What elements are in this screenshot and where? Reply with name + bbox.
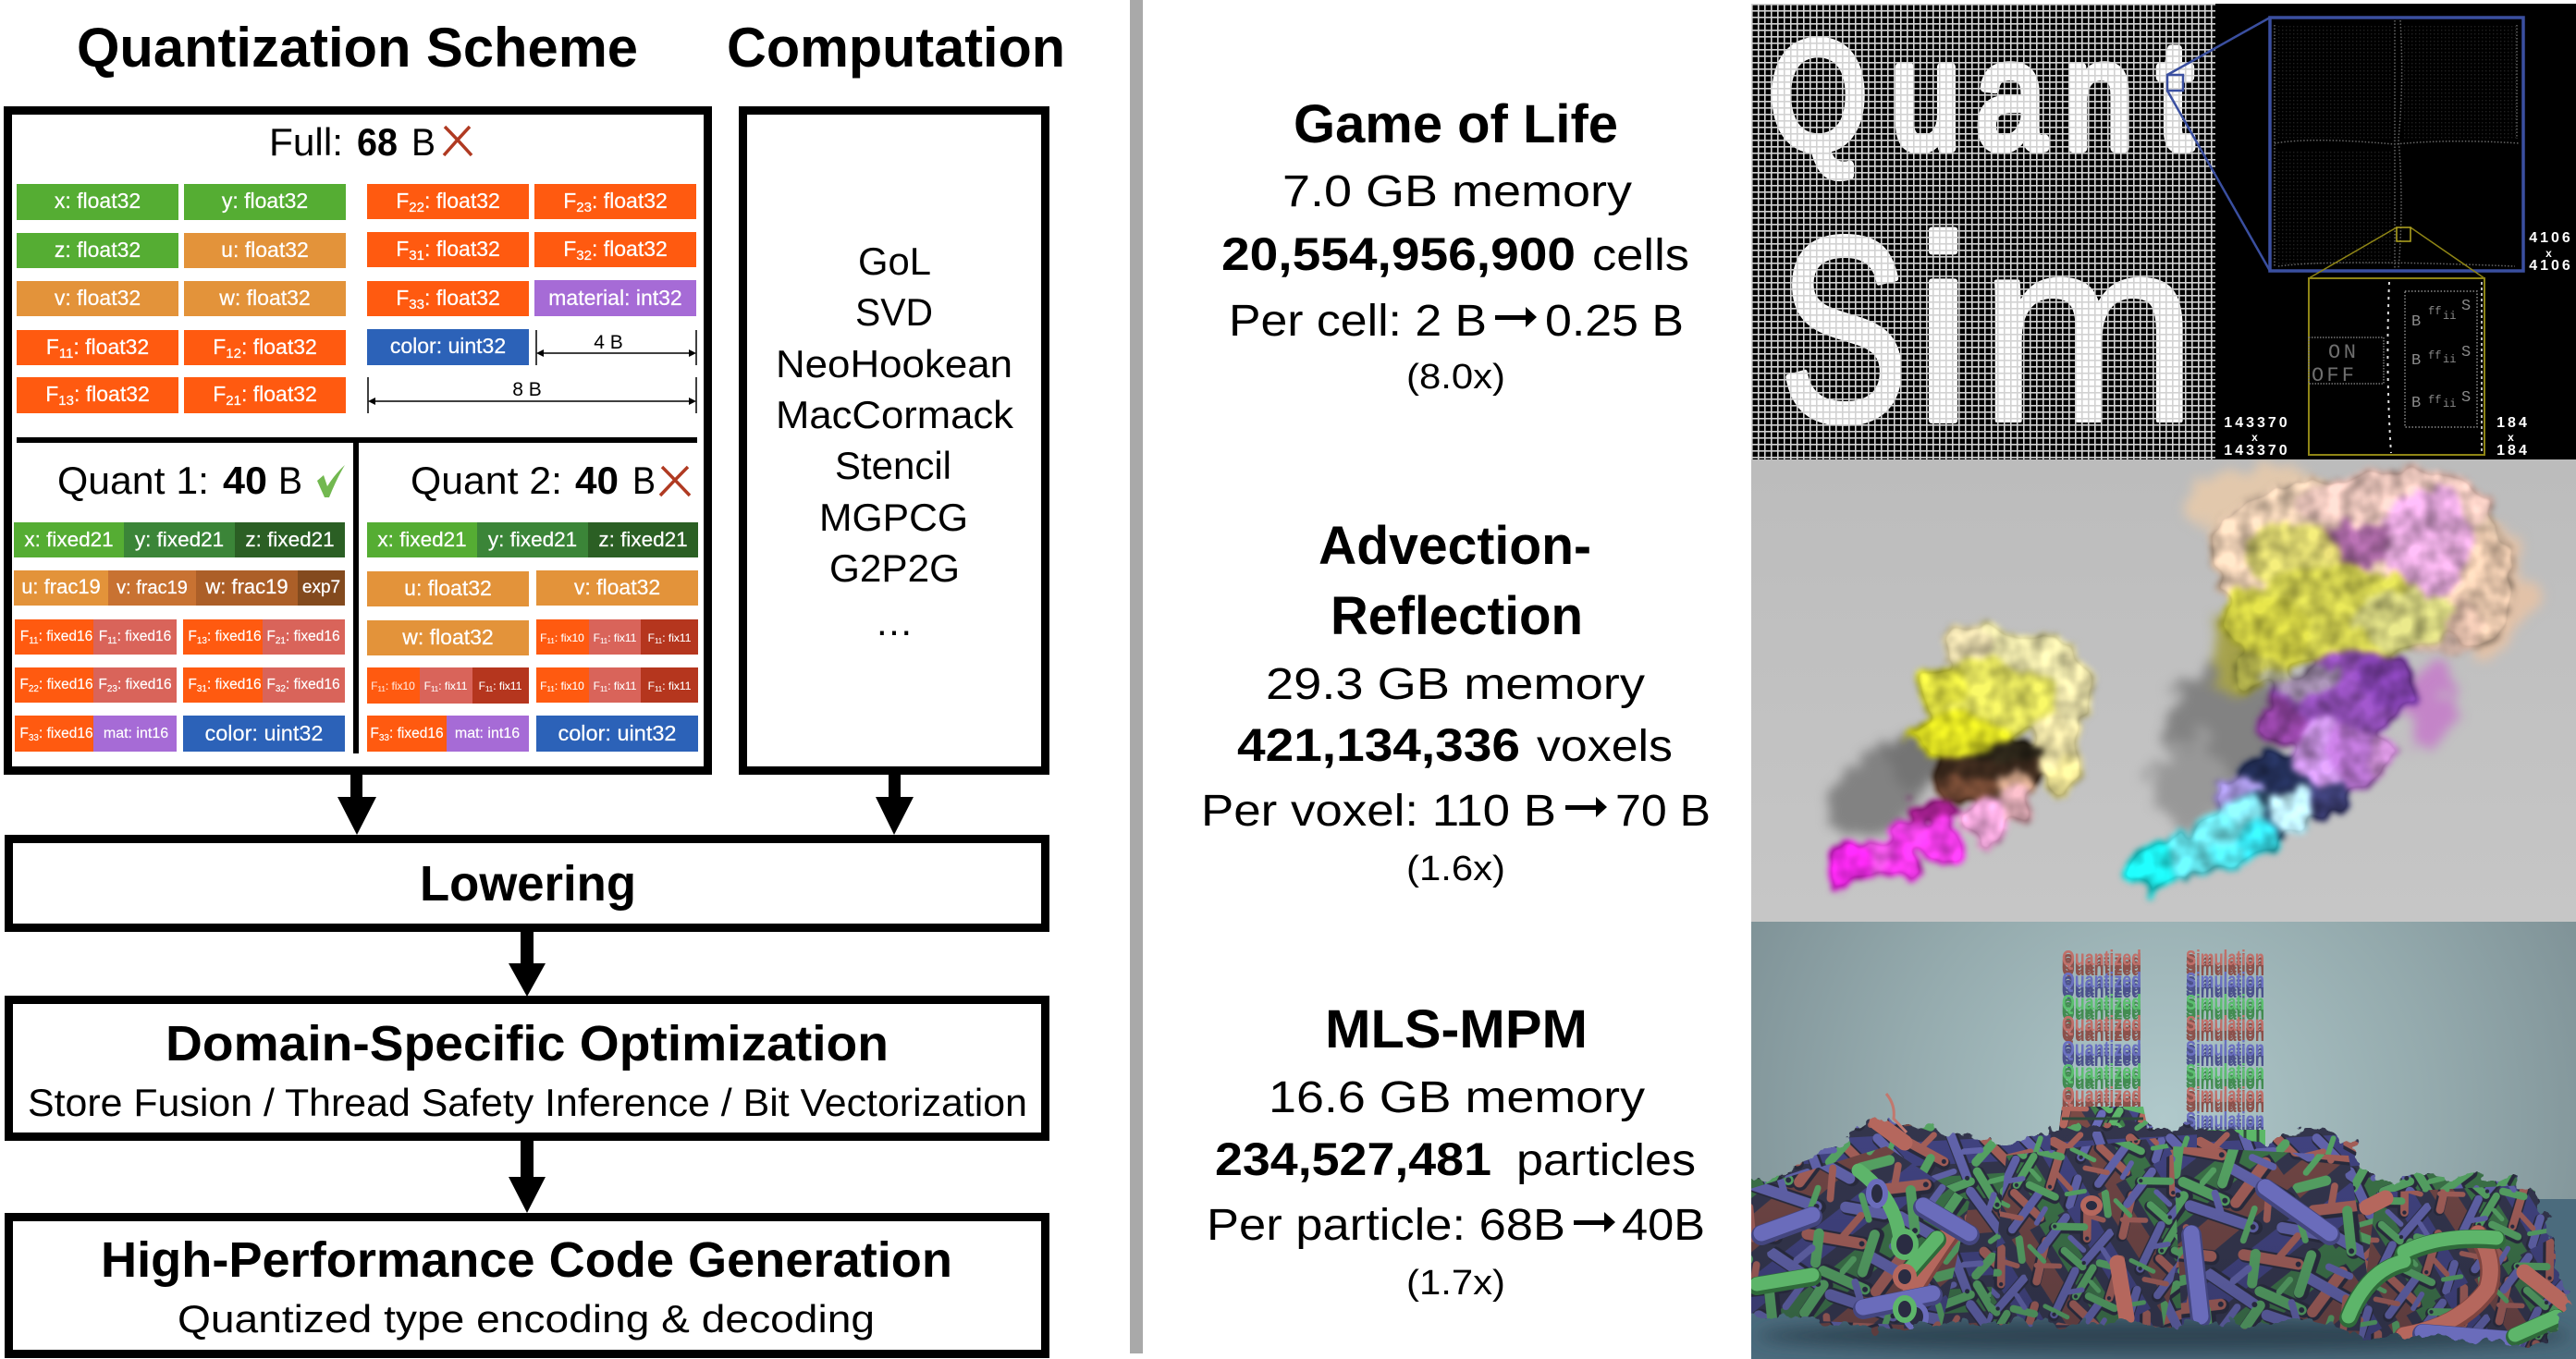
- falling words: Quantized: Quantized: [2062, 946, 2141, 970]
- quant 2 layout: deformation and color: F: [371, 680, 378, 692]
- full layout: 32-bit field cells: 32: [576, 248, 592, 263]
- full layout: 32-bit field cells: : float32: [424, 189, 500, 213]
- quant 2 layout: deformation and color: mat: int16: [455, 726, 520, 741]
- quant 1 layout: deformation and color: 33: [29, 733, 39, 743]
- icon: green check: [317, 465, 345, 497]
- title: Full 68 B: Full:: [269, 120, 343, 164]
- quant 1 layout: position and velocity: v: frac19: [117, 578, 188, 598]
- falling words: Simulation: Simulation: [2186, 1083, 2264, 1107]
- zoom inset: 184 x 184: ff: [2428, 349, 2441, 362]
- quant 1 layout: deformation and color: F: [188, 629, 197, 644]
- box: High-Performance Code Generation: [9, 1217, 1045, 1353]
- title: Quant 2 40 B: B: [632, 459, 656, 502]
- icon: red cross: [444, 127, 472, 155]
- size labels: [2224, 230, 2573, 459]
- quant 1 layout: deformation and color: F: [188, 677, 197, 692]
- quant 2 layout: deformation and color: [367, 619, 698, 752]
- title: Full 68 B: 68: [357, 120, 398, 164]
- title: Quant 1 40 B: Quant 1:: [57, 459, 209, 502]
- full layout: 32-bit field cells: y: float32: [222, 189, 308, 213]
- text block: Game of Life: (8.0x): [1406, 358, 1505, 397]
- quant 2 layout: deformation and color: 11: [655, 637, 663, 645]
- quant 1 layout: deformation and color: : fixed16: [286, 629, 340, 644]
- text block: Advection-Reflection: Per voxel: 110 B: [1201, 787, 1556, 836]
- computation kernels: NeoHookean: [776, 342, 1012, 386]
- image: Game of Life simulation: [1751, 4, 2576, 477]
- title: Quant 2 40 B: Quant 2:: [411, 459, 562, 502]
- computation kernels: [776, 239, 1014, 643]
- quant 1 layout: deformation and color: mat: int16: [104, 726, 168, 741]
- quant 2 layout: deformation and color: F: [370, 726, 379, 741]
- quant 1 layout: deformation and color: : fixed16: [117, 629, 171, 644]
- quant 2 layout: deformation and color: 11: [600, 637, 608, 645]
- falling words: Quantized: Quantized: [2062, 1036, 2141, 1060]
- quant 2 layout: deformation and color: 11: [378, 685, 386, 693]
- quant 1 layout: deformation and color: F: [19, 677, 29, 692]
- quant 1 layout: position and velocity: x: fixed21: [24, 528, 114, 551]
- box: High-Performance Code Generation: Quantized type encoding & decoding: [178, 1297, 875, 1341]
- heading: Computation: Computation: [727, 17, 1065, 79]
- falling words: Simulation: Simulation: [2186, 1108, 2264, 1132]
- text block: Advection-Reflection: [1201, 516, 1711, 888]
- text block: Game of Life: 7.0 GB memory: [1282, 167, 1632, 216]
- title: Quant 1 40 B: 40: [223, 459, 267, 502]
- full layout: 32-bit field cells: : float32: [241, 382, 317, 406]
- size labels: x: [2508, 431, 2517, 444]
- full layout: 32-bit field cells: w: float32: [218, 286, 311, 310]
- quant 2 layout: deformation and color: : fix11: [607, 631, 637, 644]
- quant 2 layout: deformation and color: 11: [547, 637, 555, 645]
- computation kernels: Stencil: [835, 444, 951, 487]
- dimension: 8 B: [368, 377, 696, 413]
- icon: red cross: [660, 467, 690, 496]
- title: Quant 2 40 B: [411, 459, 656, 502]
- quant 1 layout: position and velocity: exp7: [302, 578, 340, 597]
- quant 2 layout: position and velocity: w: float32: [401, 625, 494, 649]
- letters: Quant Sim: i: [1914, 183, 1972, 477]
- full layout: 32-bit field cells: F: [563, 189, 576, 213]
- box: High-Performance Code Generation: High-Performance Code Generation: [101, 1232, 952, 1288]
- computation kernels: SVD: [855, 290, 933, 334]
- computation kernels: G2P2G: [829, 546, 960, 590]
- quant 1 layout: deformation and color: 11: [29, 636, 39, 646]
- zoom inset: 184 x 184: B: [2411, 313, 2421, 331]
- size labels: 143370: [2224, 415, 2290, 431]
- zoom inset: 184 x 184: ii: [2443, 398, 2456, 410]
- quant 1 layout: position and velocity: u: frac19: [21, 575, 101, 598]
- falling words: Simulation: [2186, 946, 2264, 1132]
- quant 2 layout: deformation and color: 11: [485, 685, 494, 693]
- quant 1 layout: deformation and color: 23: [107, 684, 117, 694]
- text block: Advection-Reflection: 70 B: [1615, 787, 1711, 836]
- text block: MLS-MPM: 234,527,481: [1215, 1133, 1491, 1185]
- quant 2 layout: deformation and color: F: [594, 680, 600, 692]
- quant 2 layout: deformation and color: 11: [431, 685, 439, 693]
- letters: Quant Sim: S: [1779, 183, 1908, 477]
- quant 1 layout: deformation and color: : fixed16: [39, 726, 93, 741]
- box: Domain-Specific Optimization: Store Fusion / Thread Safety Inference / Bit Vectorization: [28, 1081, 1027, 1124]
- quant 1 layout: deformation and color: : fixed16: [286, 677, 340, 692]
- text block: MLS-MPM: Per particle: 68B: [1207, 1201, 1565, 1250]
- text block: Game of Life: 0.25 B: [1545, 297, 1684, 346]
- text block: Game of Life: cells: [1592, 231, 1689, 280]
- size labels: 184: [2496, 443, 2530, 459]
- loose strand: [1886, 1094, 1907, 1132]
- arrow: lowering to optimization: [509, 932, 546, 997]
- full layout: 32-bit field cells: : float32: [424, 237, 500, 261]
- zoom inset: 184 x 184: S: [2461, 389, 2471, 407]
- full layout: 32-bit field cells: : float32: [424, 286, 500, 310]
- text block: Game of Life: [1221, 94, 1689, 397]
- quant 1 layout: deformation and color: color: uint32: [204, 721, 324, 745]
- full layout: 32-bit field cells: F: [213, 335, 226, 359]
- zoom inset: 184 x 184: S: [2461, 298, 2471, 315]
- falling words: Simulation: Simulation: [2186, 1011, 2264, 1035]
- text block: Game of Life: Game of Life: [1294, 94, 1618, 154]
- full layout: 32-bit field cells: : float32: [74, 382, 150, 406]
- computation kernels: MacCormack: [776, 393, 1014, 436]
- quant 2 layout: deformation and color: F: [540, 631, 547, 644]
- tube ends: [1869, 1181, 2100, 1328]
- size labels: 184: [2496, 415, 2530, 431]
- quant 2 layout: position and velocity: x: fixed21: [377, 528, 467, 551]
- full layout: 32-bit field cells: u: float32: [221, 238, 309, 262]
- full layout: 32-bit field cells: z: float32: [55, 238, 141, 262]
- quant 1 layout: deformation and color: F: [20, 629, 29, 644]
- title: Quant 2 40 B: 40: [575, 459, 619, 502]
- full layout: 32-bit field cells: color: uint32: [390, 334, 506, 358]
- quant 1 layout: deformation and color: 21: [276, 636, 286, 646]
- falling words: Simulation: Simulation: [2186, 990, 2264, 1014]
- floor: [1751, 1199, 2576, 1359]
- smoke plume: large: [2128, 466, 2515, 891]
- full layout: 32-bit field cells: F: [396, 286, 409, 310]
- full layout: 32-bit field cells: 13: [58, 393, 74, 409]
- full layout: 32-bit field cells: : float32: [73, 335, 149, 359]
- zoom inset: 184 x 184: OFF: [2312, 364, 2354, 387]
- size labels: 4106: [2529, 230, 2573, 246]
- quant 2 layout: position and velocity: [367, 522, 698, 655]
- soft grey wisps: [1809, 467, 2530, 861]
- computation kernels: GoL: [858, 239, 931, 283]
- panel: quantization schemes: [7, 111, 708, 771]
- falling words: Quantized: Quantized: [2062, 1083, 2141, 1107]
- panel: computation list: [743, 111, 1045, 771]
- full layout: 32-bit field cells: F: [213, 382, 226, 406]
- quant 1 layout: deformation and color: 13: [197, 636, 207, 646]
- image: MLS-MPM letters pile: [1720, 922, 2576, 1359]
- quant 2 layout: deformation and color: : fix10: [555, 631, 584, 644]
- falling words: Simulation: Simulation: [2186, 968, 2264, 992]
- quant 1 layout: deformation and color: 32: [276, 684, 286, 694]
- quant 2 layout: deformation and color: color: uint32: [558, 721, 677, 745]
- zoom inset: 184 x 184: S: [2461, 344, 2471, 361]
- zoom inset: 184 x 184: ii: [2443, 353, 2456, 366]
- quant 1 layout: deformation and color: 11: [107, 636, 117, 646]
- quant 1 layout: deformation and color: F: [19, 726, 29, 741]
- text block: Advection-Reflection: Reflection: [1331, 586, 1583, 646]
- quant 1 layout: deformation and color: : fixed16: [117, 677, 172, 692]
- text block: MLS-MPM: MLS-MPM: [1325, 999, 1588, 1059]
- quant 1 layout: deformation and color: F: [266, 677, 276, 692]
- text block: MLS-MPM: particles: [1516, 1136, 1696, 1185]
- image: Advection-Reflection smoke plumes: [1751, 459, 2576, 922]
- full layout: 32-bit field cells: F: [563, 237, 576, 261]
- computation kernels: MGPCG: [819, 496, 968, 539]
- quant 2 layout: deformation and color: : fix11: [662, 680, 692, 692]
- full layout: 32-bit field cells: : float32: [592, 237, 668, 261]
- quant 2 layout: deformation and color: 11: [547, 685, 555, 693]
- size labels: x: [2545, 247, 2555, 260]
- quant 1 layout: position and velocity: z: fixed21: [245, 528, 335, 551]
- letters: Quant Sim: Quant: [1770, 9, 2192, 180]
- quant 2 layout: deformation and color: : fix11: [607, 680, 637, 692]
- computation kernels: ...: [877, 600, 912, 643]
- text block: Game of Life: 20,554,956,900: [1221, 228, 1576, 280]
- title: Full 68 B: [269, 120, 435, 164]
- zoom inset: 184 x 184: B: [2411, 395, 2421, 412]
- quant 2 layout: position and velocity: u: float32: [404, 576, 492, 600]
- quant 2 layout: position and velocity: y: fixed21: [488, 528, 577, 551]
- full layout: 32-bit field cells: F: [396, 237, 409, 261]
- zoom inset: 4106 x 4106: [2167, 18, 2523, 271]
- text block: Game of Life: Per cell: 2 B: [1229, 297, 1487, 346]
- text block: MLS-MPM: 16.6 GB memory: [1269, 1073, 1645, 1122]
- full layout: 32-bit field cells: v: float32: [55, 286, 141, 310]
- full layout: 32-bit field cells: 31: [409, 248, 424, 263]
- arrow: computation to lowering: [876, 775, 914, 835]
- zoom inset: 184 x 184: [2309, 227, 2484, 455]
- size labels: 4106: [2529, 258, 2573, 274]
- text block: Advection-Reflection: voxels: [1537, 722, 1673, 771]
- quant 2 layout: position and velocity: v: float32: [574, 575, 660, 599]
- full layout: 32-bit field cells: 23: [576, 200, 592, 215]
- quant 2 layout: deformation and color: F: [540, 680, 547, 692]
- quant 1 layout: deformation and color: [15, 619, 345, 752]
- quant 2 layout: position and velocity: z: fixed21: [598, 528, 688, 551]
- quant 1 layout: deformation and color: : fixed16: [39, 629, 92, 644]
- quant 2 layout: deformation and color: : fix10: [555, 680, 584, 692]
- quant 1 layout: deformation and color: 31: [197, 684, 207, 694]
- quant 1 layout: position and velocity: [14, 522, 345, 606]
- box: Lowering: Lowering: [420, 856, 636, 912]
- full layout: 32-bit field cells: F: [46, 335, 59, 359]
- size labels: 143370: [2224, 443, 2290, 459]
- full layout: 32-bit field cells: 33: [409, 297, 424, 312]
- large tubes: [1757, 1122, 2566, 1341]
- quant 2 layout: deformation and color: : fix10: [386, 680, 415, 692]
- text block: Advection-Reflection: Advection-: [1319, 516, 1591, 576]
- quant 1 layout: position and velocity: y: fixed21: [135, 528, 224, 551]
- divider bar: [1130, 0, 1143, 1353]
- text block: MLS-MPM: (1.7x): [1406, 1264, 1505, 1303]
- full layout: 32-bit field cells: : float32: [241, 335, 317, 359]
- full layout: 32-bit field cells: x: float32: [55, 189, 141, 213]
- size labels: x: [2251, 431, 2261, 444]
- quant 2 layout: deformation and color: : fix11: [493, 680, 522, 692]
- dimension: 4 B: 4 B: [594, 332, 623, 353]
- quant 2 layout: deformation and color: F: [594, 631, 600, 644]
- pile: tangled extruded letters: [1720, 1091, 2576, 1359]
- falling words: Quantized: [2062, 946, 2141, 1107]
- full layout: 32-bit field cells: 12: [226, 346, 241, 361]
- quant 1 layout: deformation and color: F: [99, 629, 107, 644]
- box: Domain-Specific Optimization: [9, 1000, 1045, 1137]
- zoom inset: 184 x 184: ii: [2443, 310, 2456, 323]
- quant 2 layout: deformation and color: 11: [600, 685, 608, 693]
- box: Lowering: [9, 839, 1045, 928]
- zoom inset: 184 x 184: ff: [2428, 394, 2441, 407]
- quant 1 layout: deformation and color: F: [266, 629, 276, 644]
- quant 1 layout: deformation and color: : fixed16: [207, 629, 262, 644]
- stacked stretched letters: [2053, 1107, 2265, 1179]
- full layout: 32-bit field cells: : float32: [592, 189, 668, 213]
- full layout: 32-bit field cells: 22: [409, 200, 424, 215]
- title: Quant 1 40 B: B: [278, 459, 302, 502]
- quant 2 layout: deformation and color: : fix11: [662, 631, 692, 644]
- full layout: 32-bit field cells: F: [396, 189, 409, 213]
- quant 1 layout: deformation and color: : fixed16: [207, 677, 262, 692]
- title: Quant 1 40 B: [57, 459, 302, 502]
- zoom inset: 184 x 184: B: [2411, 352, 2421, 370]
- falling words: Quantized: Quantized: [2062, 1011, 2141, 1035]
- text block: MLS-MPM: [1207, 999, 1705, 1303]
- text block: Advection-Reflection: 29.3 GB memory: [1266, 660, 1645, 709]
- falling words: Simulation: Simulation: [2186, 1036, 2264, 1060]
- smoke plume: small: [1829, 622, 2096, 888]
- quant 2 layout: deformation and color: 33: [379, 733, 389, 743]
- heading: Quantization Scheme: Quantization Scheme: [77, 17, 638, 79]
- falling words: Quantized: Quantized: [2062, 968, 2141, 992]
- letters: Quant Sim: [1772, 37, 2195, 426]
- text block: Advection-Reflection: 421,134,336: [1237, 719, 1520, 771]
- full layout: 32-bit field cells: 21: [226, 393, 241, 409]
- quant 2 layout: deformation and color: F: [648, 631, 655, 644]
- quant 2 layout: deformation and color: F: [424, 680, 431, 692]
- full layout: 32-bit field cells: [17, 184, 696, 413]
- full layout: 32-bit field cells: 11: [59, 346, 73, 361]
- falling words: Simulation: Simulation: [2186, 946, 2264, 970]
- full layout: 32-bit field cells: F: [45, 382, 58, 406]
- quant 1 layout: position and velocity: w: frac19: [204, 575, 288, 598]
- arrow: optimization to code generation: [509, 1141, 546, 1213]
- falling words: Simulation: Simulation: [2186, 1059, 2264, 1084]
- zoom inset: 184 x 184: ff: [2428, 305, 2441, 318]
- quant 2 layout: deformation and color: F: [648, 680, 655, 692]
- box: Domain-Specific Optimization: Domain-Specific Optimization: [166, 1016, 889, 1071]
- quant 1 layout: deformation and color: : fixed16: [39, 677, 93, 692]
- quant 2 layout: deformation and color: 11: [655, 685, 663, 693]
- letters: Quant Sim: m: [1979, 183, 2198, 477]
- quant 1 layout: deformation and color: 22: [29, 684, 39, 694]
- title: Full 68 B: B: [411, 120, 435, 164]
- dimension: 4 B: [536, 330, 696, 365]
- dimension: 8 B: 8 B: [512, 379, 542, 400]
- quant 2 layout: deformation and color: F: [479, 680, 485, 692]
- zoom inset: 184 x 184: ON: [2328, 341, 2356, 364]
- quant 2 layout: deformation and color: : fixed16: [389, 726, 444, 741]
- falling words: Quantized: Quantized: [2062, 1059, 2141, 1084]
- arrow: scheme to lowering: [337, 775, 376, 835]
- falling words: Quantized: Quantized: [2062, 990, 2141, 1014]
- quant 1 layout: deformation and color: F: [98, 677, 107, 692]
- text block: Advection-Reflection: (1.6x): [1406, 850, 1505, 888]
- quant 2 layout: deformation and color: : fix11: [438, 680, 468, 692]
- full layout: 32-bit field cells: material: int32: [548, 286, 682, 310]
- text block: MLS-MPM: 40B: [1622, 1201, 1705, 1250]
